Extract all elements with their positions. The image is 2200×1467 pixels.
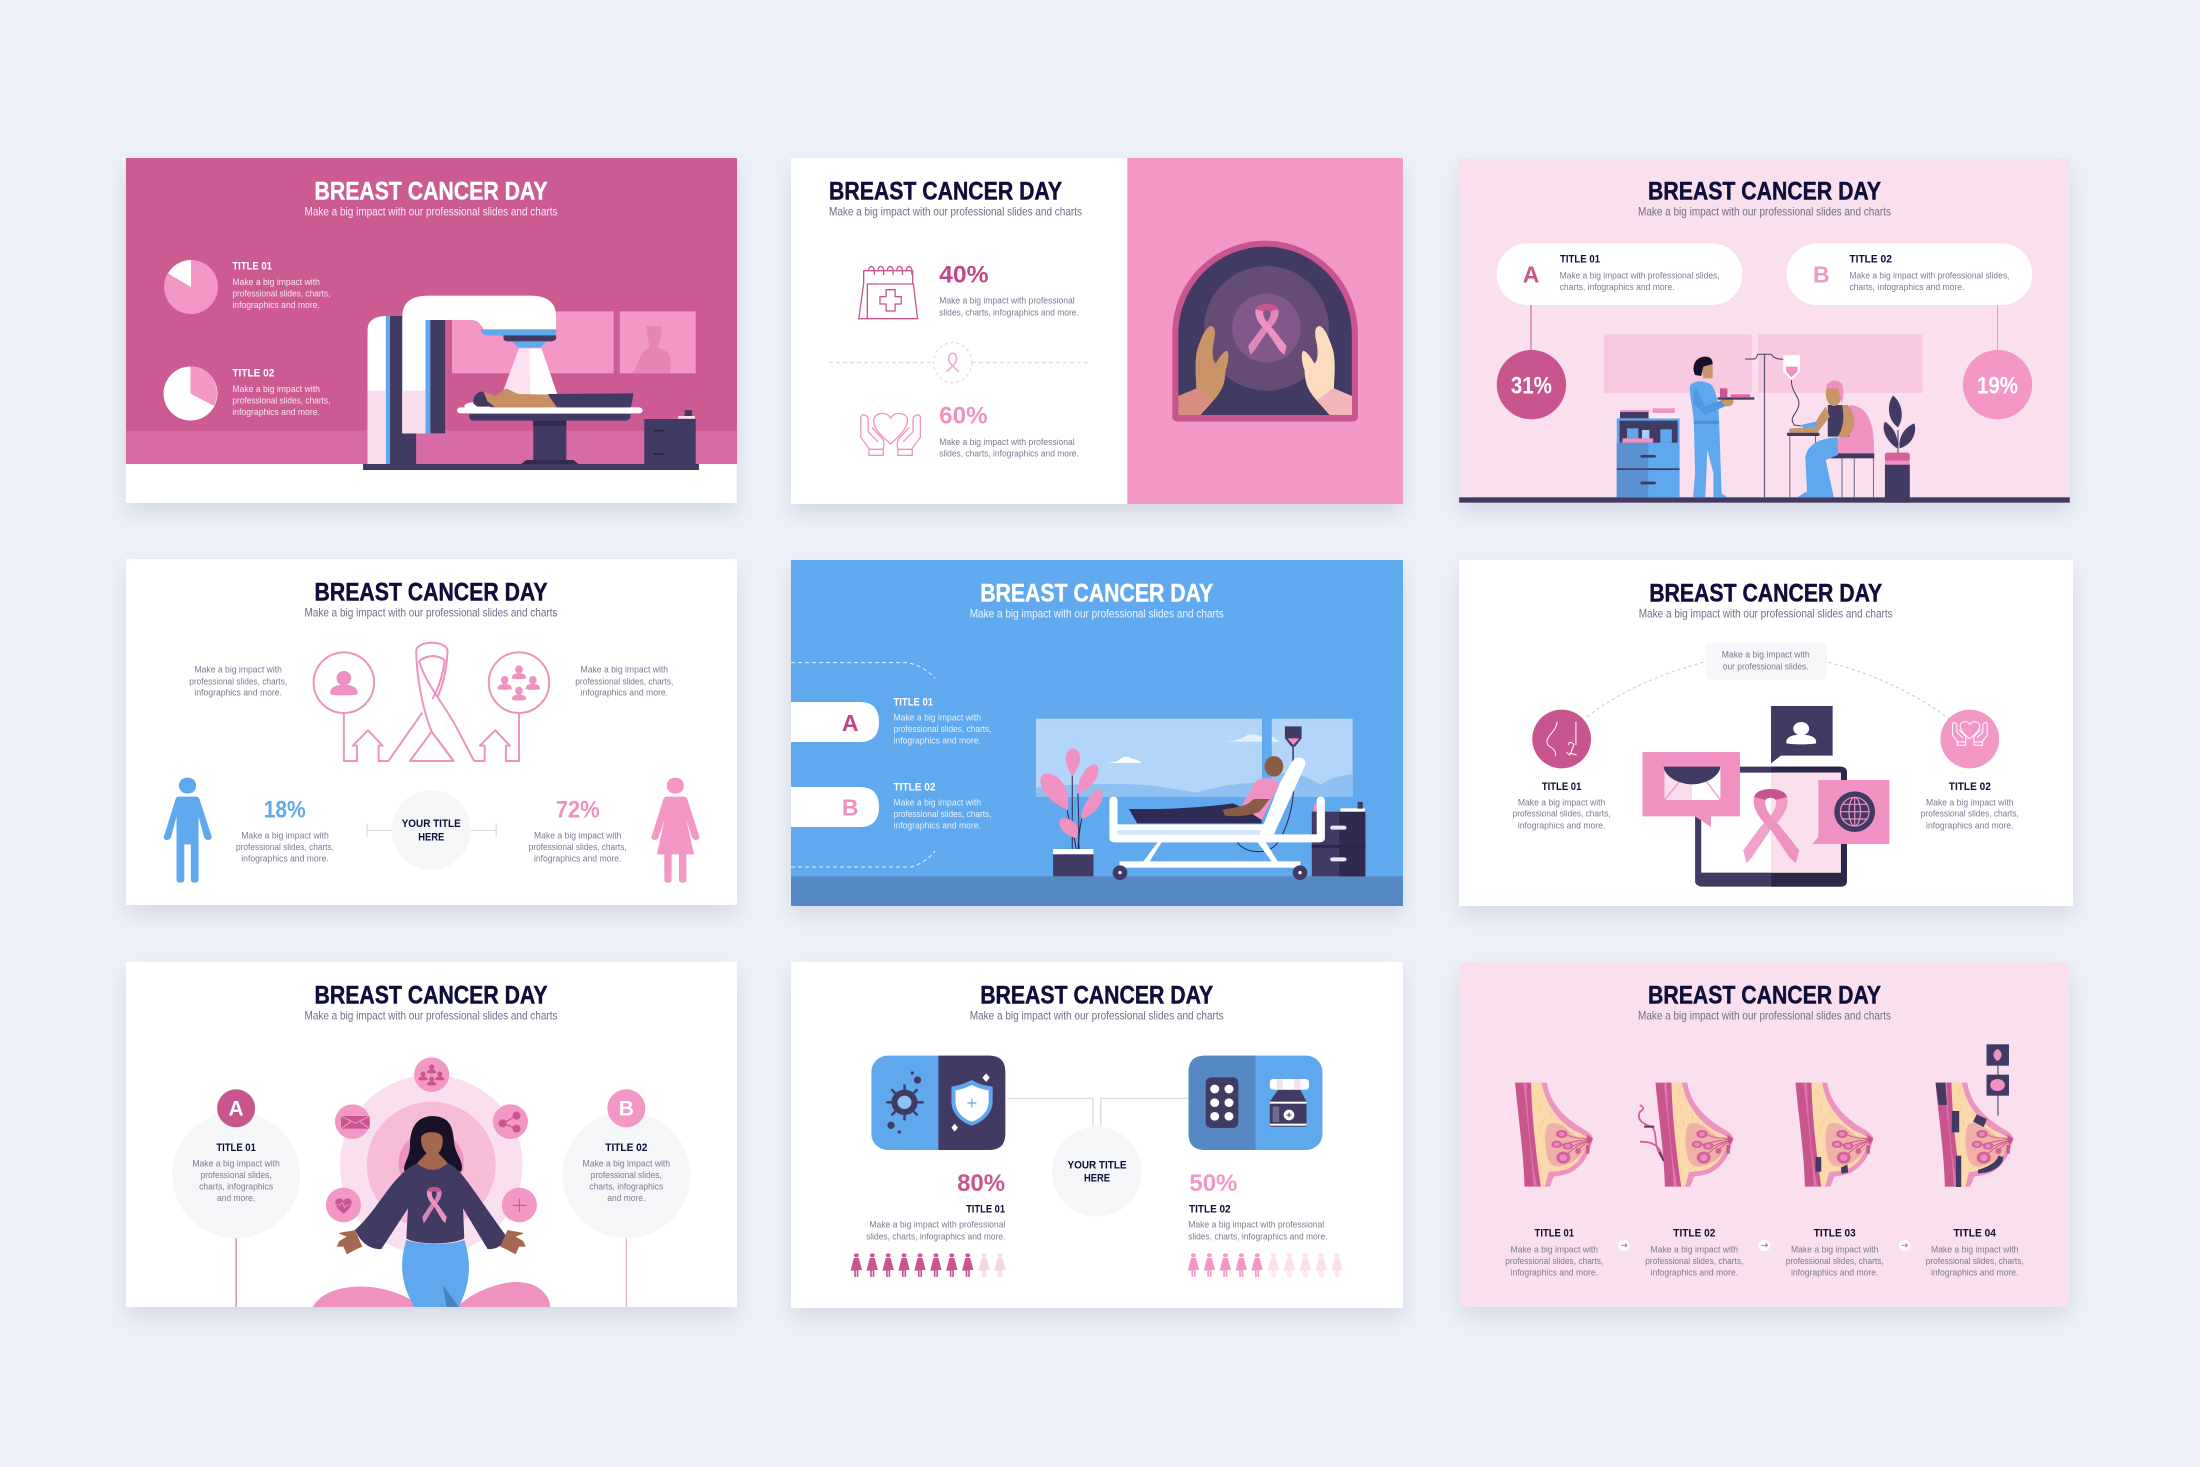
text block: title 01: infographics and more. [1518, 820, 1605, 830]
text block: title 02: infographics and more. [232, 407, 320, 417]
text block: title 01: Make a big impact with [894, 712, 981, 722]
text block: A: Make a big impact with [192, 1158, 280, 1168]
dashed connectors [1585, 662, 1950, 720]
text block: B: B [619, 1098, 634, 1120]
text block: title 03: infographics and more. [1791, 1267, 1878, 1277]
heading: Make a big impact with our professional slides and charts [1638, 1008, 1891, 1022]
text block: B: Make a big impact with [583, 1158, 670, 1168]
stat: 60%: slides, charts, infographics and more. [939, 449, 1079, 459]
stat: 40%: 40% [939, 262, 989, 289]
icon: envelope [335, 1104, 370, 1139]
heading: Make a big impact with our professional slides and charts [970, 1008, 1224, 1022]
text block: A: charts, infographics [199, 1181, 274, 1191]
text block: title 03: professional slides, charts, [1786, 1256, 1884, 1266]
heading: Make a big impact with our professional slides and charts [304, 204, 558, 218]
stat: 18%: 18% [264, 797, 306, 824]
heading: BREAST CANCER DAY [314, 178, 548, 206]
stat: 72%: 72% [556, 797, 600, 824]
heading [829, 178, 1082, 218]
heading: Make a big impact with our professional slides and charts [304, 1008, 558, 1022]
text block: title 01 [232, 260, 330, 310]
text block: title 02: TITLE 02 [232, 367, 274, 379]
callout: B [1787, 243, 2032, 419]
panel: blue patient bed slide [791, 560, 1403, 906]
stat: 80%: slides, charts, infographics and more. [866, 1231, 1005, 1241]
text block: title 02: infographics and more. [1926, 820, 2014, 830]
stat: 60%: 60% [939, 403, 988, 430]
stat: 40%: slides, charts, infographics and more. [939, 307, 1079, 317]
text block: title 02 [894, 782, 992, 831]
text block: title 02: professional slides, charts, [1921, 809, 2019, 819]
panel: radiation therapy slide [126, 158, 737, 503]
text block: title 02: Make a big impact with [894, 798, 981, 808]
text block: title 03: TITLE 03 [1814, 1228, 1856, 1240]
stat: 72%: Make a big impact with [534, 830, 621, 840]
icon: breast and ribbon badge [1532, 710, 1591, 768]
center title: HERE [1084, 1173, 1110, 1185]
panel: hands and ribbon slide [791, 158, 1403, 504]
text block: title 02: Make a big impact with [232, 384, 320, 394]
text block: title 02: B [1813, 262, 1830, 288]
center title: HERE [418, 831, 444, 843]
decorative dashed brackets [791, 663, 935, 867]
arrow: 1 to 2 [1618, 1240, 1630, 1251]
text block: top right: Make a big impact with [581, 665, 668, 675]
illustration: room and radiation machine [126, 296, 737, 503]
panel: treatment comparison slide [791, 962, 1403, 1308]
pink side panel [1127, 158, 1403, 504]
note box: Make a big impact with [1722, 650, 1810, 660]
text block: title 01: Make a big impact with [232, 277, 320, 287]
illustration: stage 3 [1796, 1083, 1873, 1187]
illustration: arch with hands and ribbon [1172, 241, 1358, 422]
text block: title 01: Make a big impact with professional slides, [1560, 270, 1720, 280]
heading [1638, 178, 1891, 218]
text block: title 01 [1513, 781, 1611, 830]
text block: title 02: TITLE 02 [1849, 254, 1892, 266]
text block: title 04: TITLE 04 [1953, 1228, 1997, 1240]
text block: A [172, 1089, 300, 1307]
stat: 50%: slides, charts, infographics and more. [1188, 1231, 1328, 1241]
heading [970, 981, 1224, 1022]
text block: title 02: infographics and more. [1651, 1267, 1738, 1277]
heading: BREAST CANCER DAY [314, 578, 548, 606]
text block: top right: professional slides, charts, [575, 676, 673, 686]
text block: title 02: Make a big impact with [1651, 1244, 1738, 1254]
center title [1052, 1127, 1142, 1217]
text block: title 02: professional slides, charts, [894, 809, 992, 819]
heading: Make a big impact with our professional slides and charts [304, 606, 558, 620]
text block: A: A [229, 1098, 244, 1120]
pie chart: title 02 [164, 366, 218, 420]
pictogram: 5 of 10 women [1188, 1253, 1343, 1277]
icon: female figure [651, 778, 699, 883]
text block: title 04: Make a big impact with [1931, 1244, 2018, 1254]
stat: 80%: Make a big impact with professional [869, 1220, 1005, 1230]
text block: title 02: TITLE 02 [1673, 1228, 1715, 1240]
panel: online support tablet slide [1459, 560, 2073, 906]
stat: 80% [866, 1170, 1005, 1241]
text block: B: TITLE 02 [605, 1142, 647, 1154]
text block: title 02: Make a big impact with professional slides, [1849, 270, 2009, 280]
text block: title 02: TITLE 02 [894, 782, 936, 794]
stat: 40% [939, 262, 1079, 317]
icon: share [493, 1104, 528, 1139]
heading: BREAST CANCER DAY [1648, 981, 1881, 1009]
text block: B: charts, infographics [589, 1181, 664, 1191]
icon: hands heart badge [1940, 710, 1999, 768]
text block: title 01: TITLE 01 [894, 696, 933, 708]
tab: A [791, 702, 879, 742]
icon: plus [502, 1188, 537, 1222]
illustration: tablet with speech bubbles [1642, 706, 1889, 887]
callout: A [1497, 243, 1742, 419]
panel: nurse and patient slide [1459, 158, 2070, 503]
heading: BREAST CANCER DAY [980, 580, 1213, 608]
heading: BREAST CANCER DAY [1648, 178, 1881, 206]
heading: Make a big impact with our professional slides and charts [1639, 606, 1893, 620]
heading [1638, 981, 1891, 1022]
stat: 60%: Make a big impact with professional [939, 437, 1075, 447]
icon: male figure [164, 778, 212, 883]
pie chart: title 01 [164, 260, 218, 314]
text block: title 02 [232, 367, 330, 417]
illustration: nurse, patient and drip [1459, 334, 2070, 503]
text block: title 01: TITLE 01 [1542, 781, 1581, 793]
heading: BREAST CANCER DAY [980, 981, 1213, 1009]
heading: BREAST CANCER DAY [314, 981, 548, 1009]
text block: title 02: professional slides, charts, [232, 395, 330, 405]
panel: cancer stages slide [1459, 962, 2070, 1307]
illustration: stage 2 [1639, 1083, 1733, 1187]
stat: 72%: infographics and more. [534, 853, 621, 863]
arrow: 2 to 3 [1759, 1240, 1770, 1251]
text block: B: professional slides, [591, 1170, 662, 1180]
text block: title 04: professional slides, charts, [1926, 1256, 2024, 1266]
center title: YOUR TITLE [1068, 1160, 1126, 1172]
text block: title 01: TITLE 01 [1535, 1228, 1574, 1240]
text block: title 01: charts, infographics and more. [1560, 282, 1675, 292]
text block: title 01: TITLE 01 [1560, 254, 1600, 266]
heading [304, 578, 558, 620]
illustration: stage 1 [1515, 1083, 1593, 1187]
heading [970, 580, 1224, 620]
tab: A: A [842, 710, 859, 736]
panel: awareness ribbon and gender stats slide [126, 559, 737, 905]
text block: title 04: infographics and more. [1931, 1267, 2018, 1277]
text block: top right [575, 665, 673, 698]
text block: title 03: Make a big impact with [1791, 1244, 1878, 1254]
text block: title 02: charts, infographics and more. [1849, 282, 1964, 292]
text block: title 01: professional slides, charts, [1505, 1256, 1603, 1266]
stat: 31%: 31% [1511, 372, 1552, 399]
heading [304, 178, 558, 218]
text block: title 01 [1505, 1228, 1603, 1277]
panel: woman with icons slide [126, 962, 737, 1307]
heading: BREAST CANCER DAY [1649, 580, 1882, 608]
text block: title 03 [1786, 1228, 1884, 1277]
text block: title 01: professional slides, charts, [894, 724, 992, 734]
text block: title 01: TITLE 01 [232, 260, 272, 272]
illustration: outlined ribbon with houses and balloons [314, 643, 549, 761]
illustration: patient in hospital bed [791, 719, 1403, 906]
icon: hands holding heart [861, 413, 920, 455]
stat: 19%: 19% [1977, 372, 2018, 399]
tab: B: B [842, 795, 859, 821]
center title [402, 818, 461, 843]
stat: 18%: professional slides, charts, [236, 842, 334, 852]
icon card: virus and shield [871, 1056, 1005, 1150]
heading [304, 981, 558, 1022]
text block: title 01: infographics and more. [894, 735, 981, 745]
text block: top left: Make a big impact with [194, 665, 282, 675]
text block: B [562, 1089, 690, 1307]
stat: 72%: professional slides, charts, [529, 842, 627, 852]
stat: 80%: TITLE 01 [966, 1204, 1005, 1216]
text block: title 01: A [1523, 262, 1539, 288]
stat: 72% [529, 797, 627, 863]
icon: heart pulse [326, 1188, 361, 1222]
heading: Make a big impact with our professional slides and charts [829, 204, 1082, 218]
stat: 50%: TITLE 02 [1189, 1204, 1231, 1216]
stat: 50%: 50% [1189, 1170, 1237, 1197]
text block: title 01 [894, 696, 992, 745]
text block: title 02 [1921, 781, 2019, 830]
text block: title 02 [1645, 1228, 1743, 1277]
note box: our professional slides. [1723, 661, 1809, 671]
icon: calendar with cross [859, 266, 918, 319]
text block: title 02: infographics and more. [894, 821, 981, 831]
stat: 80%: 80% [957, 1170, 1005, 1197]
divider with small ribbon [829, 343, 1090, 383]
illustration: woman surrounded by rings [313, 1075, 550, 1307]
heading: Make a big impact with our professional slides and charts [970, 606, 1224, 620]
stat: 50%: Make a big impact with professional [1188, 1220, 1324, 1230]
icon: people [414, 1057, 449, 1092]
icon card: pills and bottle [1189, 1056, 1322, 1150]
heading [1639, 580, 1893, 620]
text block: title 01: Make a big impact with [1518, 797, 1605, 807]
stat: 60% [939, 403, 1079, 459]
pictogram: 8 of 10 women [851, 1253, 1006, 1277]
text block: title 01: infographics and more. [1511, 1267, 1598, 1277]
text block: top left: professional slides, charts, [189, 676, 287, 686]
stat: 18% [236, 797, 334, 863]
center badge connector [367, 790, 496, 870]
text block: A: professional slides, [201, 1170, 272, 1180]
stat: 18%: infographics and more. [241, 853, 329, 863]
stat: 40%: Make a big impact with professional [939, 296, 1075, 306]
text block: title 02: TITLE 02 [1949, 781, 1991, 793]
stat: 18%: Make a big impact with [241, 830, 329, 840]
heading: Make a big impact with our professional slides and charts [1638, 204, 1891, 218]
text block: title 01: infographics and more. [232, 300, 320, 310]
note box [1705, 643, 1827, 680]
illustration: stage 4 [1936, 1044, 2013, 1187]
text block: title 01 [1523, 254, 1720, 292]
text block: title 01: professional slides, charts, [1513, 809, 1611, 819]
heading: BREAST CANCER DAY [829, 178, 1062, 206]
text block: A: and more. [217, 1193, 255, 1203]
stat: 50% [1188, 1170, 1328, 1241]
text block: title 01: Make a big impact with [1511, 1244, 1598, 1254]
text block: top left: infographics and more. [194, 688, 282, 698]
text block: title 02: professional slides, charts, [1645, 1256, 1743, 1266]
tab: B [791, 787, 879, 827]
text block: A: TITLE 01 [216, 1142, 256, 1154]
center title: YOUR TITLE [402, 818, 461, 830]
text block: title 04 [1926, 1228, 2024, 1277]
text block: top right: infographics and more. [581, 688, 668, 698]
text block: title 02 [1813, 254, 2009, 292]
arrow: 3 to 4 [1899, 1240, 1910, 1251]
text block: title 01: professional slides, charts, [232, 289, 330, 299]
text block: title 02: Make a big impact with [1926, 797, 2014, 807]
connector lines [1007, 1098, 1188, 1127]
text block: top left [189, 665, 287, 698]
text block: B: and more. [607, 1193, 645, 1203]
